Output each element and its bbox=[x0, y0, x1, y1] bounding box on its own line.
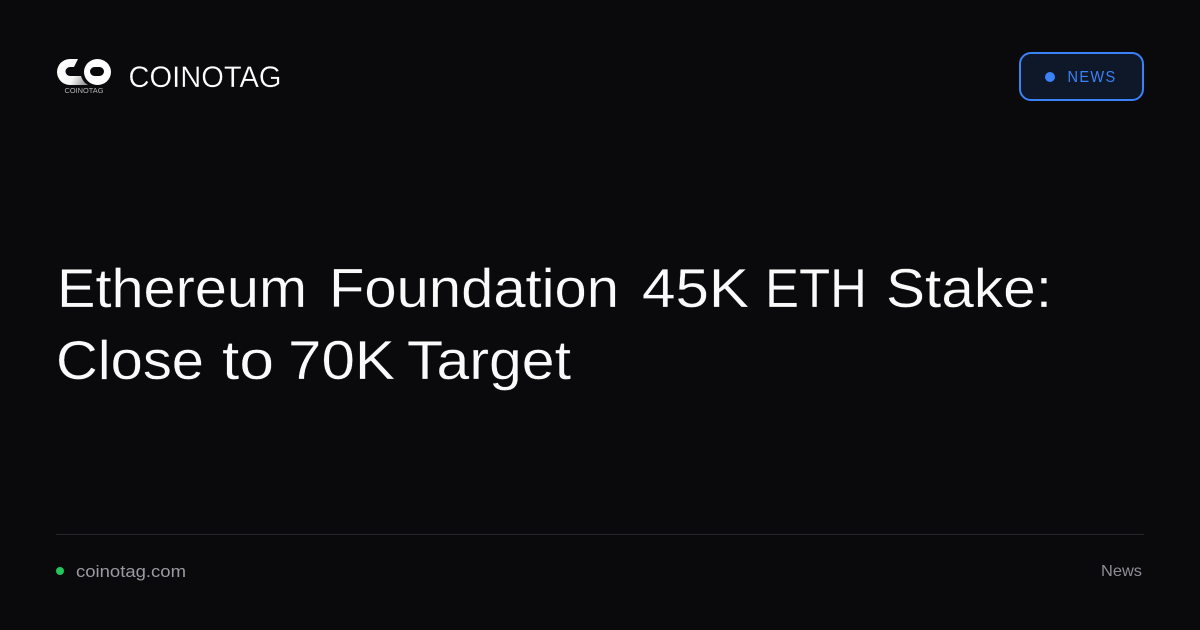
status dot bbox=[56, 567, 64, 575]
title: 45K bbox=[642, 257, 749, 319]
site url: coinotag.com bbox=[76, 562, 186, 581]
title bbox=[56, 257, 1052, 391]
footer category: News bbox=[1101, 563, 1142, 580]
title: Stake: bbox=[886, 257, 1052, 319]
title: Close bbox=[56, 329, 204, 391]
title: Ethereum bbox=[57, 257, 307, 319]
brand name: COINOTAG bbox=[128, 61, 282, 94]
title: Target bbox=[407, 329, 571, 391]
title: Foundation bbox=[329, 257, 619, 319]
badge dot bbox=[1045, 72, 1055, 82]
footer site bbox=[56, 562, 186, 581]
badge label: NEWS bbox=[1068, 68, 1117, 86]
logo small wordmark: COINOTAG bbox=[64, 88, 104, 95]
category badge bbox=[1020, 53, 1143, 100]
brand logo bbox=[57, 59, 282, 95]
icon: CO logo mark bbox=[57, 59, 111, 85]
title: to bbox=[222, 329, 274, 391]
title: ETH bbox=[765, 257, 867, 319]
title: 70K bbox=[288, 329, 395, 391]
